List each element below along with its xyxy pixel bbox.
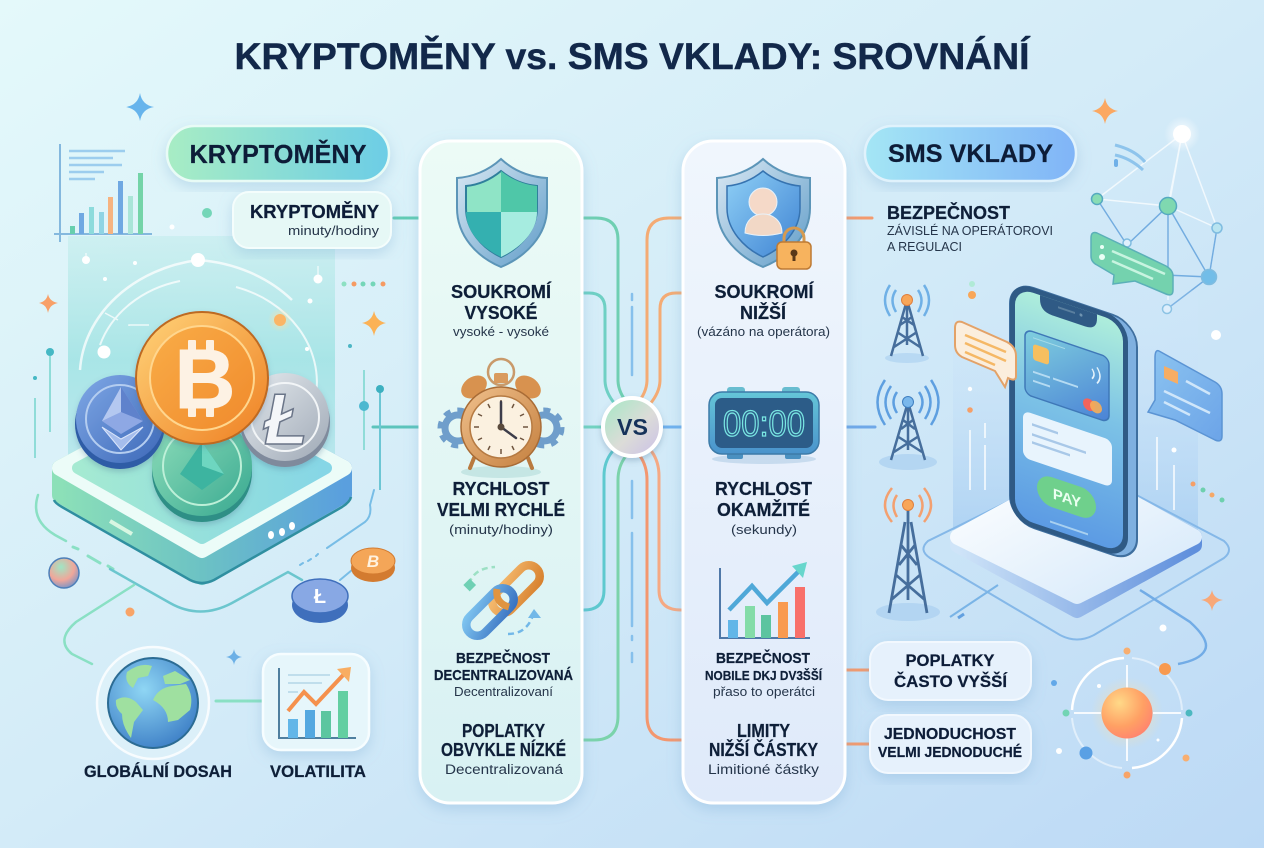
icon: chain link xyxy=(462,561,544,640)
VS badge: VS xyxy=(617,414,648,440)
text: limits xyxy=(708,721,819,777)
text: speed high: RYCHLOST xyxy=(452,479,550,499)
label: volatility: VOLATILITA xyxy=(270,762,366,781)
bubble: green chat xyxy=(1091,233,1173,295)
icon: shield with lock xyxy=(717,159,811,269)
coin: litecoin: Ł xyxy=(263,380,308,460)
text: privacy lower: (vázáno na operátora) xyxy=(697,324,830,339)
text: security mobile xyxy=(705,649,822,699)
VS badge xyxy=(603,398,661,456)
phone xyxy=(1010,280,1137,563)
heading pill: SMS VKLADY: SMS VKLADY xyxy=(888,140,1053,168)
glow beam behind coins xyxy=(68,236,335,483)
text: limits: NIŽŠÍ ČÁSTKY xyxy=(709,739,818,760)
network graph xyxy=(1092,116,1222,314)
panel: SMS column xyxy=(683,141,845,803)
text: privacy high: SOUKROMÍ xyxy=(451,281,552,302)
heading pill: KRYPTOMĚNY: KRYPTOMĚNY xyxy=(190,139,366,169)
text: speed high: (minuty/hodiny) xyxy=(449,522,553,537)
decorative dots and sparkles xyxy=(958,98,1224,686)
small bitcoin xyxy=(351,548,395,582)
text: privacy high: VYSOKÉ xyxy=(464,302,538,323)
text: speed high xyxy=(437,479,565,537)
coin: ethereum xyxy=(75,375,165,469)
text: security SMS: A REGULACI xyxy=(887,239,962,254)
circuit lines xyxy=(36,490,374,701)
text: security decentralised: Decentralizovaní xyxy=(454,684,553,699)
text: security SMS: ZÁVISLÉ NA OPERÁTOROVI xyxy=(887,223,1053,238)
text: speed instant: OKAMŽITÉ xyxy=(717,499,810,520)
orb: glowing sun node xyxy=(1056,648,1192,778)
icon: growth chart xyxy=(720,562,810,638)
orbit arcs xyxy=(80,260,317,395)
icon: alarm clock with gears xyxy=(440,359,562,478)
coin: bitcoin: B xyxy=(175,332,235,426)
text: fees low: Decentralizovaná xyxy=(445,762,564,777)
card: fees often higher: ČASTO VYŠŠÍ xyxy=(894,672,1008,691)
text: security mobile: NOBILE DKJ DV3ŠŠÍ xyxy=(705,668,822,683)
card: simplicity: VELMI JEDNODUCHÉ xyxy=(878,744,1022,761)
card: fees often higher xyxy=(870,642,1031,700)
coin: litecoin xyxy=(240,373,330,467)
text: speed instant xyxy=(715,479,812,537)
card: kryptomeny speed xyxy=(233,192,391,248)
right illustration: SMS scene xyxy=(876,98,1229,778)
small litecoin xyxy=(292,579,348,623)
small bitcoin: B xyxy=(367,552,379,571)
text: speed instant: (sekundy) xyxy=(731,522,797,537)
text: privacy lower: SOUKROMÍ xyxy=(714,281,814,302)
left illustration: crypto scene xyxy=(33,93,395,701)
bubble: orange chat xyxy=(955,322,1016,387)
text: fees low: OBVYKLE NÍZKÉ xyxy=(441,739,566,760)
platform xyxy=(923,472,1229,664)
coin: green ethereum xyxy=(152,416,252,522)
ball xyxy=(49,558,79,588)
text: security SMS xyxy=(887,202,1053,254)
icon: shield xyxy=(457,159,547,267)
heading pill: KRYPTOMĚNY xyxy=(167,126,389,181)
text: privacy high xyxy=(451,281,552,339)
card: kryptomeny speed: minuty/hodiny xyxy=(288,223,380,238)
text: privacy lower: NIŽŠÍ xyxy=(740,302,787,323)
card: fees often higher: POPLATKY xyxy=(906,651,995,670)
platform xyxy=(54,392,351,583)
beam xyxy=(953,290,1198,530)
icon: digital clock: 00:00 xyxy=(723,403,805,444)
tower 1 xyxy=(885,285,929,363)
mini bar chart xyxy=(54,144,152,242)
small litecoin: Ł xyxy=(314,586,326,608)
text: privacy high: vysoké - vysoké xyxy=(453,324,549,339)
text: speed high: VELMI RYCHLÉ xyxy=(437,499,565,520)
card: volatility chart xyxy=(263,654,369,750)
card: simplicity xyxy=(870,715,1031,773)
text: security decentralised: BEZPEČNOST xyxy=(456,649,550,667)
title: KRYPTOMĚNY vs. SMS VKLADY: SROVNÁNÍ xyxy=(234,35,1031,77)
text: security mobile: přaso to operátci xyxy=(713,684,815,699)
icon: digital clock xyxy=(709,387,819,464)
text: limits: Limitioné částky xyxy=(708,762,819,777)
bubble: blue chat xyxy=(1148,351,1222,441)
text: security mobile: BEZPEČNOST xyxy=(716,649,810,667)
orange dot xyxy=(126,608,134,616)
text: security decentralised xyxy=(434,649,573,699)
heading pill: SMS VKLADY xyxy=(865,126,1076,181)
text: security decentralised: DECENTRALIZOVANÁ xyxy=(434,667,573,684)
card: simplicity: JEDNODUCHOST xyxy=(884,726,1016,743)
text: security SMS: BEZPEČNOST xyxy=(887,202,1010,223)
decorative dots xyxy=(33,208,386,490)
tower 3 xyxy=(876,488,940,621)
phone: PAY xyxy=(1053,486,1082,512)
tower 2 xyxy=(878,380,938,470)
text: fees low: POPLATKY xyxy=(462,721,545,741)
text: limits: LIMITY xyxy=(737,721,790,741)
text: fees low xyxy=(441,721,566,777)
panel: crypto column xyxy=(420,141,582,803)
text: privacy lower xyxy=(697,281,830,339)
sparkle stars xyxy=(39,93,386,665)
icon: globe xyxy=(97,647,209,759)
text: speed instant: RYCHLOST xyxy=(715,479,812,499)
coin: bitcoin xyxy=(136,312,268,444)
connectors between panels xyxy=(373,218,875,744)
label: global reach: GLOBÁLNÍ DOSAH xyxy=(84,762,232,781)
card: kryptomeny speed: KRYPTOMĚNY xyxy=(250,201,379,222)
